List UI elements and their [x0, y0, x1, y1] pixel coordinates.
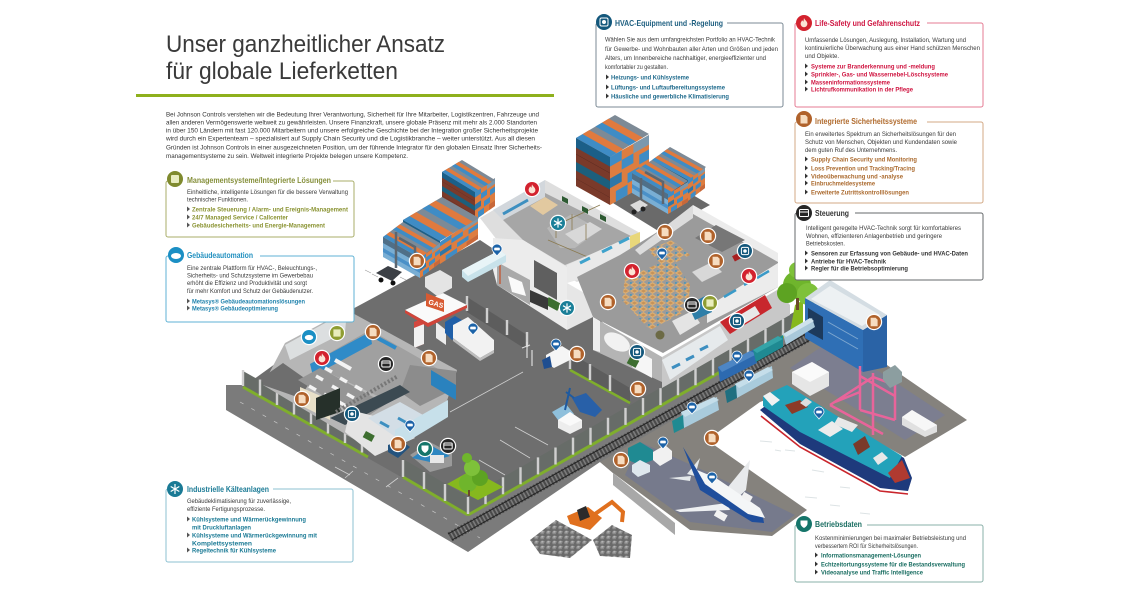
panel heading: Betriebsdaten [815, 519, 862, 529]
panel text [805, 131, 957, 154]
wall: scrapyard [613, 473, 675, 535]
panel list: Einbruchmeldesysteme [811, 180, 875, 188]
warehouse A: plant room block [493, 238, 593, 330]
title: für globale Lieferketten [166, 58, 398, 85]
panel text [187, 498, 291, 513]
gas station and tanker [405, 293, 494, 361]
forklift crane [365, 232, 415, 286]
intro paragraph: Gründen ist Johnson Controls in einer ausgezeichneten Position, um der führende Integrator für den globalen Einsatz Ihrer Sicherheits- [166, 144, 542, 151]
panel list: Heizungs- und Kühlsysteme [611, 74, 689, 82]
intro paragraph: wird durch ein Expertenteam – spezialisiert auf Supply Chain Security und die Logistikbranche – weiter unterstützt. Aus all diesen [165, 136, 535, 143]
panel list: Loss Prevention und Tracking/Tracing [811, 166, 915, 172]
panel list: Kühlsysteme und Wärmerückgewinnung mit [192, 532, 318, 540]
warehouse A: storage hall [480, 180, 640, 283]
panel text [805, 37, 980, 60]
forklift crane [630, 172, 663, 214]
panel text: Ein erweitertes Spektrum an Sicherheitslösungen für den [805, 131, 956, 138]
panel list: Systeme zur Branderkennung und -meldung [811, 64, 935, 70]
panel list: 24/7 Managed Service / Callcenter [192, 214, 288, 222]
panel list: Erweiterte Zutrittskontrolllösungen [811, 190, 909, 196]
white trailer [462, 250, 506, 282]
panel text: Eine zentrale Plattform für HVAC-, Beleuchtungs-, [187, 265, 317, 272]
road dashes [240, 402, 480, 538]
intro paragraph: managementsysteme zu sein. Weltweit integrierte Projekte belegen unsere Kompetenz. [166, 153, 408, 160]
gas station and tanker: GAS [427, 299, 444, 310]
yard markings [335, 372, 548, 487]
panel list: Sprinkler-, Gas- und Wassernebel-Löschsysteme [811, 72, 948, 78]
right container stacks [576, 115, 710, 232]
panel list: Lichtrufkommunikation in der Pflege [811, 86, 913, 94]
panel list [187, 206, 349, 230]
port containers and crane [792, 362, 937, 437]
panel text: und Objekte. [805, 53, 839, 60]
panel text [815, 535, 966, 550]
panel list: Videoanalyse und Traffic Intelligence [821, 570, 923, 576]
panel list: Masseninformationssysteme [811, 80, 890, 86]
panel list: Informationsmanagement-Lösungen [821, 552, 921, 560]
intro paragraph: allen anderen Vermögenswerte weltweit zu gewährleisten. Unsere Finanzkraft, unsere globale Präsenz mit mehr als 2.000 Standorten [166, 120, 537, 126]
panel text: Schutz von Menschen, Objekten und Kundendaten sowie [805, 139, 957, 146]
panel text: Intelligent geregelte HVAC-Technik sorgt für komfortableres [806, 225, 961, 232]
panel text [806, 225, 961, 248]
panel: Integrierte Sicherheitssysteme [795, 111, 983, 203]
panel text: komfortabler zu gestalten. [605, 64, 668, 71]
port and airport ground [600, 337, 967, 536]
freight train [718, 318, 815, 382]
panel text: effiziente Fertigungsprozesse. [187, 506, 265, 513]
gate crossing [522, 342, 532, 366]
panel: Industrielle Kälteanlagen [166, 481, 353, 562]
icon: management [167, 171, 183, 187]
panel list: Häusliche und gewerbliche Klimatisierung [611, 94, 729, 100]
icon: flame [796, 15, 812, 31]
panel text: erhöht die Effizienz und Produktivität und sorgt [187, 280, 307, 287]
icon: cloud [168, 247, 184, 263]
panel text: Kostenminimierungen bei maximaler Betriebsleistung und [815, 535, 966, 542]
yard [243, 240, 668, 515]
panel heading: Integrierte Sicherheitssysteme [815, 116, 917, 126]
intro paragraph: in über 150 Ländern mit fast 120.000 Mitarbeitern und unsere erfolgreiche Geschichte bei der Integration großer Sicherheitsprojekte [166, 128, 538, 134]
container ship [760, 385, 912, 494]
panel: Gebäudeautomation [166, 247, 354, 322]
panel list: Kühlsysteme und Wärmerückgewinnung [192, 516, 306, 524]
panel list: Regler für die Betriebsoptimierung [811, 266, 908, 272]
panel list [815, 552, 965, 576]
panel heading: Gebäudeautomation [187, 250, 253, 260]
panel list [805, 64, 948, 94]
panel list: Antriebe für HVAC-Technik [811, 258, 886, 266]
panel list: Metasys® Gebäudeautomationslösungen [192, 298, 305, 306]
panel list [187, 516, 318, 554]
airplane [669, 447, 765, 523]
panel text: Alters, um Innenbereiche nachhaltiger, energieeffizienter und [605, 55, 766, 62]
pallet boxes [425, 270, 452, 296]
icon: snowflake [167, 481, 183, 497]
panel heading: Steuerung [815, 208, 849, 218]
panel list [606, 74, 729, 100]
panel: Steuerung [795, 205, 983, 280]
icon: HVAC unit [596, 14, 612, 30]
warehouse B: front rooms [593, 290, 790, 388]
panel text: kontinuierliche Überwachung aus einer Hand schützen Menschen [805, 44, 980, 52]
panel list: Sensoren zur Erfassung von Gebäude- und HVAC-Daten [811, 250, 968, 258]
isometric logistics scene [226, 115, 967, 558]
office building [263, 310, 457, 472]
panel: Life-Safety und Gefahrenschutz [795, 15, 983, 107]
water ripples [760, 441, 870, 514]
fences [243, 296, 803, 515]
panel list [805, 156, 917, 196]
panel text: Einheitliche, intelligente Lösungen für die bessere Verwaltung [187, 189, 348, 196]
tree lawn [447, 453, 503, 500]
panel: Managementsysteme / Integrierte Lösungen [166, 171, 354, 237]
panel list [187, 298, 305, 312]
green title rule [136, 94, 554, 97]
panel text: technischer Funktionen. [187, 196, 248, 204]
panel heading: Industrielle Kälteanlagen [187, 484, 269, 494]
panel list: Metasys® Gebäudeoptimierung [192, 304, 278, 312]
panel heading: Managementsysteme/Integrierte Lösungen [187, 175, 331, 185]
panel: HVAC-Equipment und -Regelung [596, 14, 783, 107]
panel text: Gebäudeklimatisierung für zuverlässige, [187, 498, 291, 505]
panel text: Sicherheits- und Schutzsysteme im Gewerbebau [187, 272, 313, 280]
panel text [605, 36, 778, 71]
panel list: Gebäudesicherheits- und Energie-Management [192, 222, 326, 230]
panel list: Komplettsystemen [192, 540, 252, 548]
panel text [187, 265, 317, 295]
left container stacks [365, 160, 495, 286]
road and rail ground [226, 315, 817, 552]
van [542, 346, 570, 369]
panel list: mit Druckluftanlagen [192, 524, 251, 532]
panel list: Regeltechnik für Kühlsysteme [192, 548, 276, 554]
large tree [777, 262, 819, 332]
blue port building [805, 280, 887, 372]
trucks on quay [628, 366, 773, 477]
panel text: Wählen Sie aus dem umfangreichsten Portfolio an HVAC-Technik [605, 36, 776, 44]
panel text: Umfassende Lösungen, Auslegung, Installation, Wartung und [805, 37, 966, 44]
intro paragraph: Bei Johnson Controls verstehen wir die Bedeutung Ihrer Verantwortung, Sicherheit für Ihre Mitarbeiter, Logistikzentren, Fahrzeuge und [166, 112, 539, 118]
panel text: dem guten Ruf des Unternehmens. [805, 147, 897, 154]
panel list [805, 250, 968, 272]
panel text: für mehr Komfort und Schutz der Gebäudenutzer. [187, 288, 313, 295]
title [166, 31, 445, 85]
panel heading: HVAC-Equipment und -Regelung [615, 18, 723, 28]
title: Unser ganzheitlicher Ansatz [166, 31, 445, 58]
panel: Betriebsdaten [795, 516, 983, 582]
panel list: Videoüberwachung und -analyse [811, 174, 903, 180]
panel heading: Life-Safety und Gefahrenschutz [815, 18, 920, 28]
warehouse B: distribution hall [577, 205, 778, 353]
panel list: Echtzeitortungssysteme für die Bestandsverwaltung [821, 562, 965, 568]
excavator and rock piles [530, 502, 632, 558]
panel list: Supply Chain Security und Monitoring [811, 156, 917, 164]
panel text: für Gewerbe- und Wohnbauten aller Arten und Größen und jeden [605, 46, 778, 53]
panel list: Lüftungs- und Luftaufbereitungssysteme [611, 84, 725, 92]
panel text: verbessertem ROI für Sicherheitslösungen. [815, 543, 918, 550]
panel text: Betriebskosten. [806, 240, 845, 248]
icon: control panel [796, 205, 812, 221]
panel text [187, 189, 348, 204]
service icons [294, 181, 882, 484]
panel list: Zentrale Steuerung / Alarm- und Ereignis-Management [192, 206, 349, 214]
railway [448, 329, 819, 540]
intro paragraph [165, 112, 542, 160]
panel text: Wohnen, effizienteren Anlagenbetrieb und geringere [806, 233, 942, 240]
icon: security [796, 111, 812, 127]
machine yard with crane [552, 388, 602, 434]
icon: shield [796, 516, 812, 532]
